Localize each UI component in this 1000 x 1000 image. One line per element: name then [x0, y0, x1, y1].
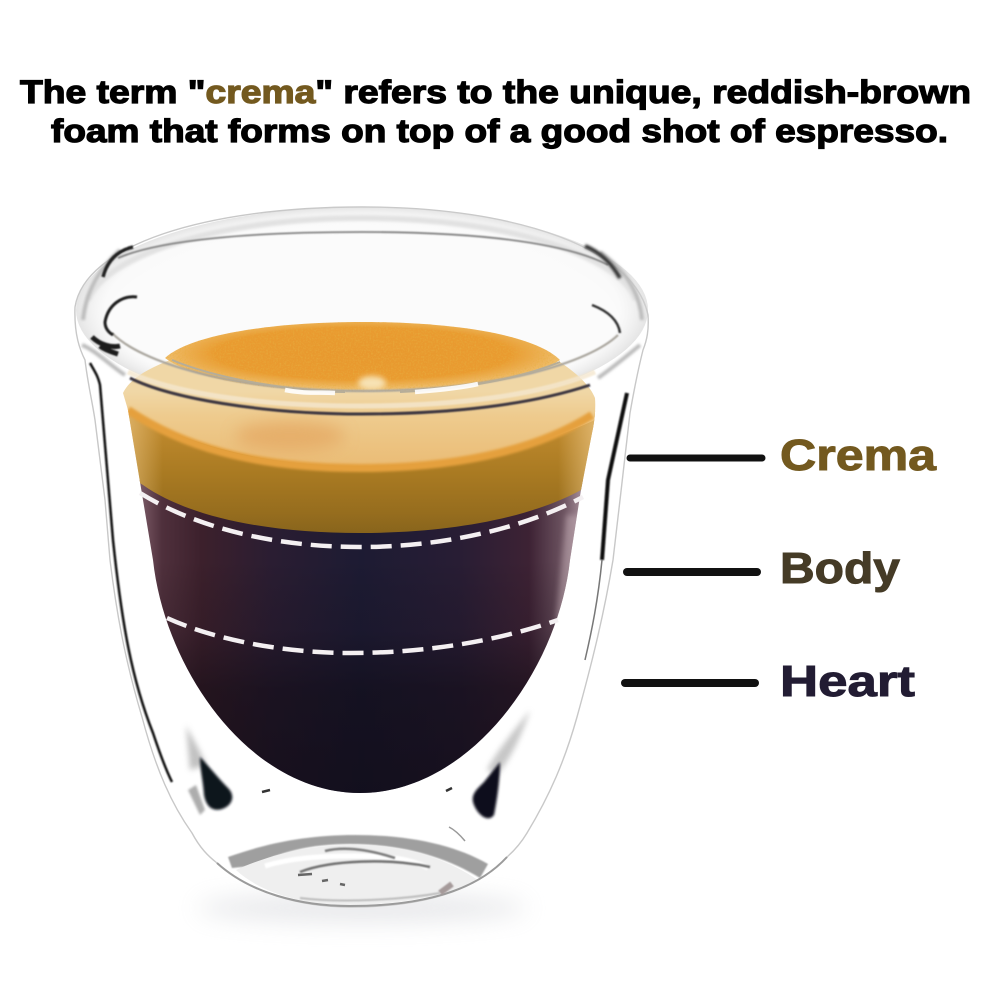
label: body: Body [780, 544, 901, 593]
liquid layers [110, 350, 610, 800]
title: foam that forms on top of a good shot of espresso. [51, 113, 948, 149]
glass wall lines [90, 363, 627, 782]
glass base [217, 835, 507, 906]
leader line: body [627, 568, 757, 576]
espresso glass [75, 207, 648, 922]
label: crema: Crema [780, 431, 937, 480]
leader line: crema [630, 454, 762, 462]
rim dark left strokes [103, 247, 133, 277]
dashed divider: body and heart [167, 618, 558, 653]
front rim dark line [130, 378, 590, 414]
crema surface [165, 322, 560, 392]
rim shading [76, 207, 648, 413]
lower glass blobs [186, 710, 530, 841]
base rim [217, 857, 507, 906]
inner rim interior [105, 232, 620, 392]
label: heart: Heart [780, 657, 915, 706]
blotch in pale band [235, 421, 345, 451]
body and heart colour [140, 480, 583, 793]
foam line [128, 410, 592, 468]
dashed divider: crema and body [140, 493, 583, 547]
glass shadow [197, 894, 527, 922]
pale upper crema band [123, 360, 596, 466]
title: The term " crema " refers to the unique, reddish-brown [20, 74, 971, 110]
title [20, 74, 971, 149]
base floor [236, 845, 478, 905]
base swirls [265, 856, 428, 868]
base arch [228, 835, 488, 878]
rim dark right strokes [585, 246, 620, 278]
dark gold crema [120, 405, 600, 533]
leader line: heart [625, 679, 755, 687]
rim outer highlight [88, 218, 636, 300]
light side reflection [556, 515, 582, 620]
rim lines [82, 218, 642, 414]
glass body [75, 207, 648, 907]
front rim soft line [128, 372, 595, 406]
